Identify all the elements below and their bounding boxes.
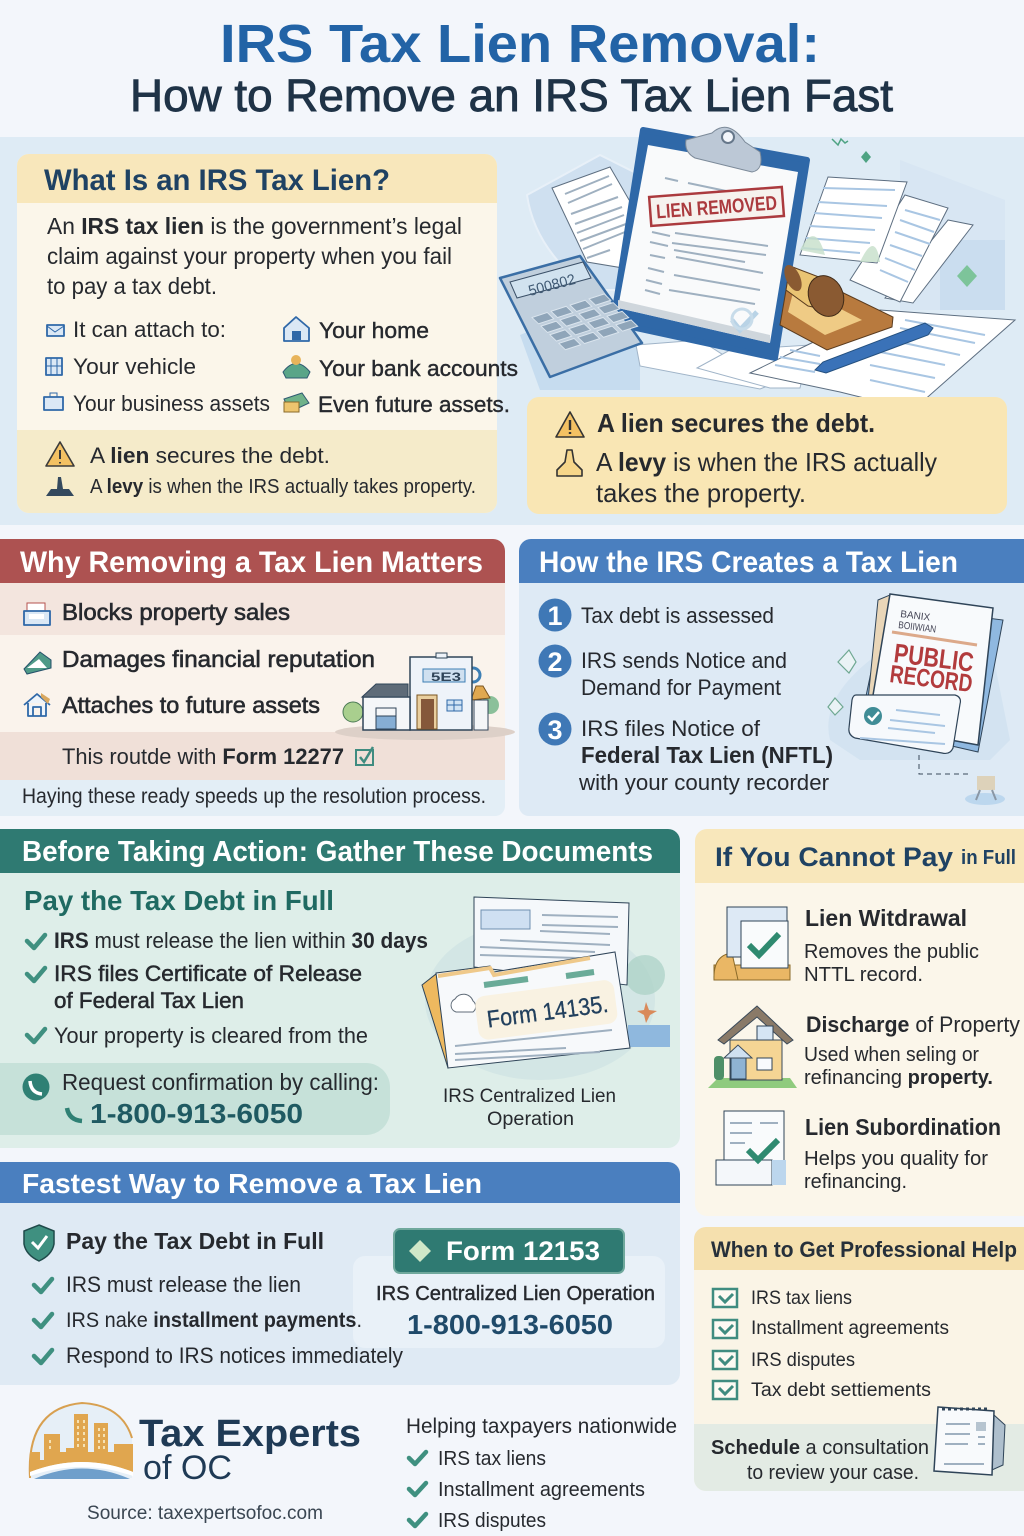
lien subordination: refinancing. — [804, 1171, 907, 1193]
footer services list: IRS tax liens — [438, 1448, 546, 1470]
subheading: Pay the Tax Debt in Full — [24, 885, 334, 916]
definition text: claim against your property when you fail — [47, 243, 452, 269]
panel: if you cannot pay in full — [695, 829, 1024, 1216]
heading: Before Taking Action: Gather These Documents — [22, 836, 653, 868]
footer brand name: Tax Experts — [139, 1413, 361, 1455]
definition text: An IRS tax lien is the government’s legal — [47, 213, 462, 239]
illustration: clipboard, calculator, gavel and papers: LIEN REMOVED — [655, 192, 778, 223]
callout: lien secures the debt: A lien secures the debt. — [597, 408, 875, 438]
illustration: public record document — [828, 594, 1010, 805]
checklist: Your property is cleared from the — [54, 1023, 368, 1048]
asset list: Even future assets. — [318, 392, 510, 417]
step 1: Tax debt is assessed — [581, 603, 774, 628]
heading: in Full — [961, 847, 1016, 869]
panel: when to get professional help — [694, 1227, 1024, 1491]
note: speeds up resolution: Haying these ready speeds up the resolution process. — [22, 785, 486, 808]
heading: How the IRS Creates a Tax Lien — [539, 546, 958, 579]
lien withdrawal: Lien Witdrawal — [805, 905, 967, 931]
checklist — [34, 1272, 403, 1368]
lien subordination — [804, 1114, 1001, 1193]
footer services list: Installment agreements — [438, 1479, 645, 1501]
step 3: Federal Tax Lien (NFTL) — [581, 742, 833, 768]
callout: phone: 1-800-913-6050 — [90, 1098, 303, 1129]
callout: lien secures the debt: A levy is when the IRS actually — [596, 447, 937, 477]
caption — [443, 1086, 616, 1130]
checkbox list: IRS disputes — [751, 1350, 855, 1371]
asset list: Your bank accounts — [319, 356, 518, 381]
lien withdrawal — [804, 905, 979, 986]
checklist: IRS must release the lien — [66, 1272, 301, 1297]
footer logo — [30, 1403, 133, 1479]
caption: Operation — [487, 1109, 574, 1130]
step 2: IRS sends Notice and — [581, 648, 787, 673]
title: How to Remove an IRS Tax Lien Fast — [130, 70, 894, 121]
illustration: public record document: PUBLIC — [892, 638, 975, 678]
illustration: public record document: RECORD — [888, 660, 974, 698]
lien subordination: Helps you quality for — [804, 1148, 988, 1170]
panel: hero background — [0, 137, 1024, 525]
asset list: Your home — [319, 318, 429, 343]
step 3 — [538, 712, 833, 795]
title — [130, 14, 894, 121]
card: centralized lien operation: IRS Centralized Lien Operation — [376, 1283, 655, 1305]
checklist — [27, 928, 428, 1048]
icon: house with yard — [708, 1006, 797, 1088]
discharge of property: refinancing property. — [804, 1067, 993, 1089]
schedule consultation: Schedule a consultation — [711, 1437, 929, 1459]
icon: notepad calendar — [934, 1407, 1005, 1475]
caption: IRS Centralized Lien — [443, 1086, 616, 1107]
panel: before taking action — [0, 829, 680, 1148]
checkbox list — [713, 1288, 949, 1401]
illustration: public record document: BANIX — [900, 609, 931, 624]
step 2: Demand for Payment — [581, 675, 781, 700]
panel: what is an IRS tax lien — [17, 154, 518, 513]
step 3: with your county recorder — [578, 770, 829, 795]
discharge of property: Discharge of Property — [806, 1012, 1020, 1037]
panel: fastest way to remove a tax lien: Pay the Tax Debt in Full — [66, 1228, 324, 1254]
checklist: IRS files Certificate of Release — [54, 961, 362, 986]
illustration: form 14135 folder: Form 14135. — [485, 991, 610, 1034]
step 3: IRS files Notice of — [581, 716, 761, 741]
asset list — [44, 317, 518, 417]
step 2: 2 — [547, 647, 563, 677]
panel: why removing a tax lien matters: Attaches to future assets — [62, 692, 320, 718]
lien vs levy note: A levy is when the IRS actually takes property. — [90, 476, 476, 498]
panel: fastest way to remove a tax lien — [0, 1162, 680, 1385]
form 12277 line: This routde with Form 12277 — [62, 744, 344, 769]
checklist: IRS nake installment payments. — [66, 1309, 362, 1332]
heading: If You Cannot Pay — [715, 842, 953, 872]
lien withdrawal: Removes the public — [804, 941, 979, 963]
checklist: Respond to IRS notices immediately — [66, 1343, 403, 1368]
checkbox list: IRS tax liens — [751, 1288, 852, 1309]
button: form 12153 — [394, 1229, 624, 1273]
schedule consultation — [711, 1437, 929, 1484]
icon: shield — [24, 1225, 54, 1261]
discharge of property — [804, 1012, 1020, 1089]
definition text: to pay a tax debt. — [47, 273, 217, 299]
checkbox list: Tax debt settiements — [751, 1380, 931, 1401]
schedule consultation: to review your case. — [747, 1462, 919, 1484]
callout: phone — [0, 1063, 390, 1135]
step 2 — [538, 644, 787, 700]
card: centralized lien operation — [353, 1256, 665, 1348]
step 1: 1 — [547, 601, 563, 631]
discharge of property: Used when seling or — [804, 1044, 979, 1066]
illustration: house — [335, 653, 515, 740]
panel: why removing a tax lien matters: Blocks property sales — [62, 599, 290, 625]
illustration: clipboard, calculator, gavel and papers — [500, 127, 1015, 410]
panel: why removing a tax lien matters — [0, 539, 515, 816]
icon: damaged money — [24, 652, 51, 674]
heading: When to Get Professional Help — [711, 1237, 1017, 1262]
heading: What Is an IRS Tax Lien? — [44, 164, 390, 197]
footer services list — [406, 1415, 677, 1532]
lien withdrawal: NTTL record. — [804, 964, 923, 986]
illustration: public record document: BOIIWIAN — [898, 620, 937, 636]
footer services list: Helping taxpayers nationwide — [406, 1415, 677, 1438]
callout: phone: Request confirmation by calling: — [62, 1069, 379, 1095]
step 1 — [538, 598, 774, 632]
callout: lien secures the debt — [527, 397, 1007, 514]
icon: document and folder with check — [716, 1111, 786, 1185]
panel: how the IRS creates a tax lien — [519, 539, 1024, 816]
asset list: Your vehicle — [73, 354, 196, 379]
definition text — [47, 213, 462, 299]
heading: Why Removing a Tax Lien Matters — [20, 546, 483, 579]
lien vs levy note: A lien secures the debt. — [90, 443, 330, 468]
checklist: IRS must release the lien within 30 days — [54, 928, 428, 953]
footer brand name: of OC — [143, 1449, 232, 1487]
footer services list: IRS disputes — [438, 1510, 546, 1532]
step 3: 3 — [547, 715, 563, 745]
icon: house — [24, 693, 50, 716]
icon: printer — [24, 603, 50, 625]
icon: warning triangle — [556, 412, 584, 437]
checklist: of Federal Tax Lien — [54, 988, 244, 1013]
illustration: house: 5E3 — [431, 670, 461, 684]
illustration: form 14135 folder — [422, 897, 670, 1080]
icon: file with check — [714, 907, 790, 980]
lien vs levy note — [46, 442, 476, 498]
card: centralized lien operation: 1-800-913-6050 — [407, 1309, 613, 1340]
source: Source: taxexpertsofoc.com — [87, 1503, 323, 1524]
icon: stamp — [557, 450, 582, 476]
title: IRS Tax Lien Removal: — [220, 14, 820, 74]
lien subordination: Lien Subordination — [805, 1114, 1001, 1140]
illustration: clipboard, calculator, gavel and papers: 500802 — [527, 271, 577, 300]
footer brand name — [139, 1413, 361, 1487]
asset list: It can attach to: — [73, 317, 226, 342]
callout: lien secures the debt: takes the property. — [596, 478, 806, 508]
panel: why removing a tax lien matters: Damages financial reputation — [62, 646, 375, 672]
button: form 12153: Form 12153 — [446, 1236, 600, 1266]
checkbox list: Installment agreements — [751, 1318, 949, 1339]
asset list: Your business assets — [73, 391, 270, 416]
heading: Fastest Way to Remove a Tax Lien — [22, 1168, 482, 1199]
